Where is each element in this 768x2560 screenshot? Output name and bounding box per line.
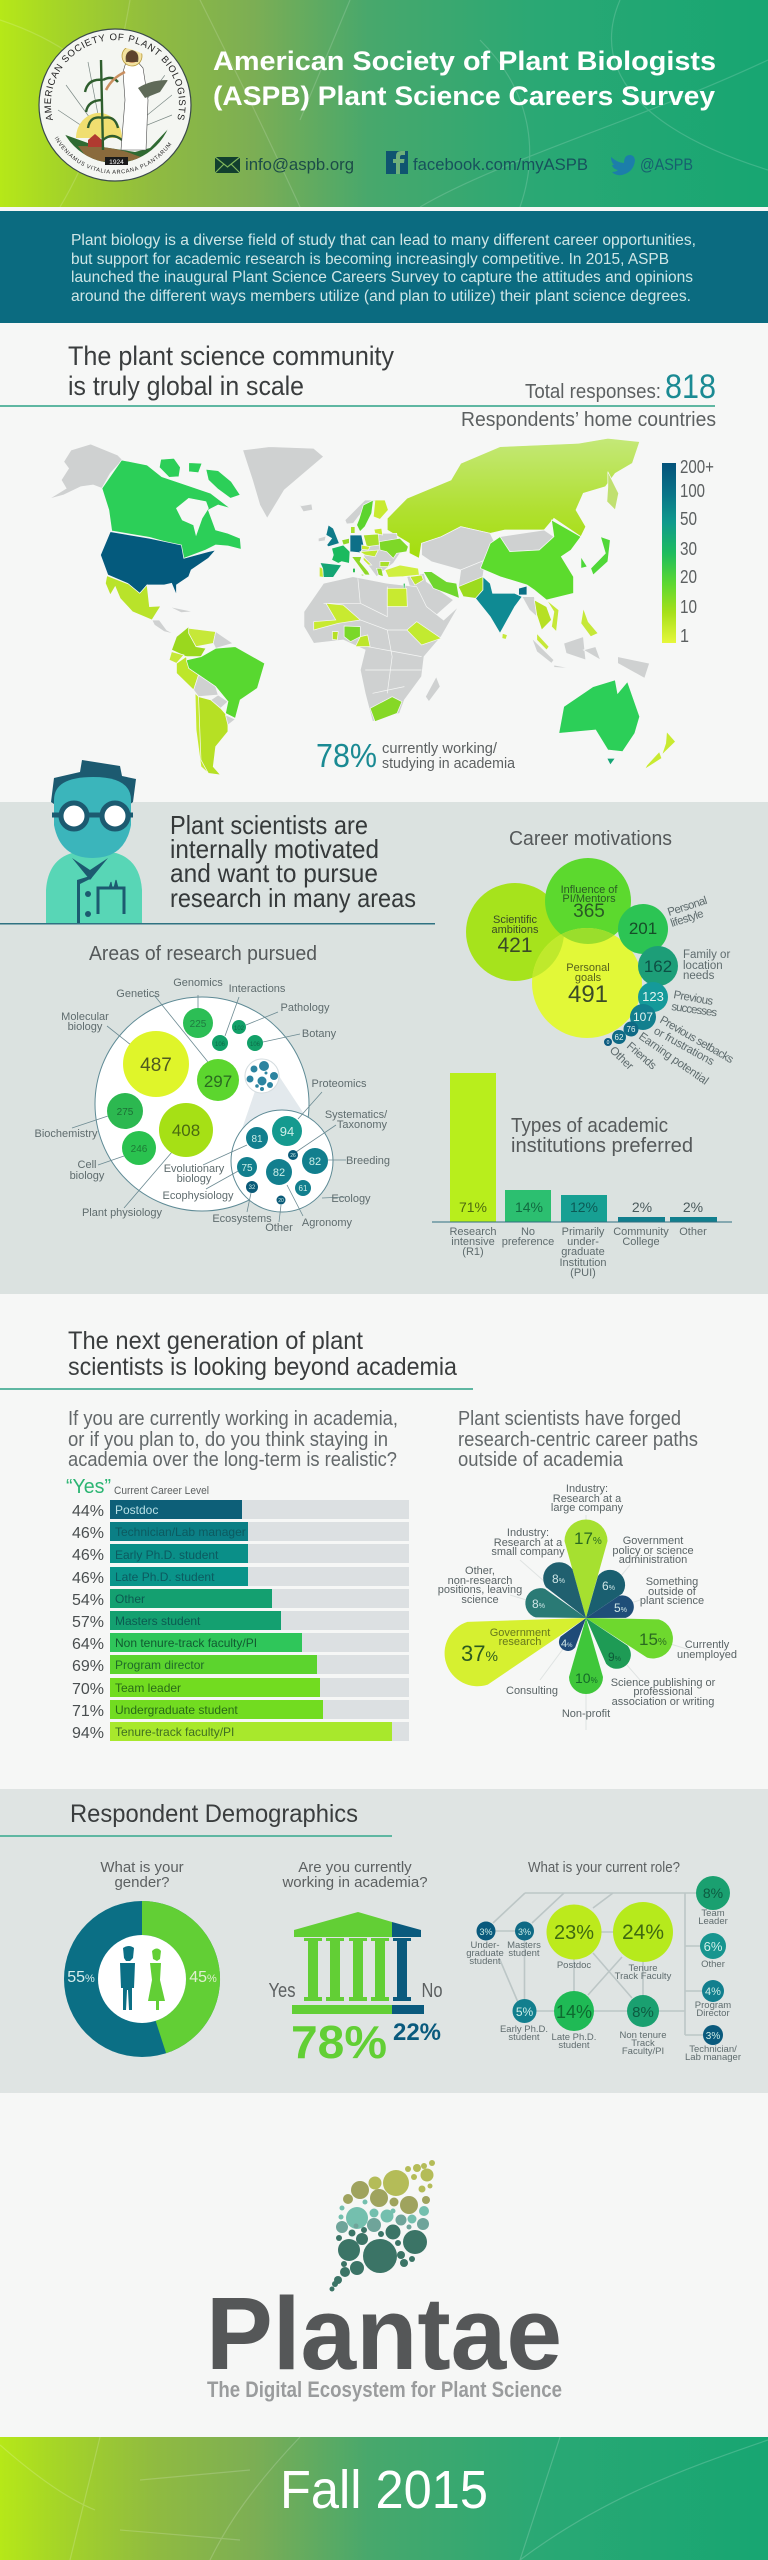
petal labels: association or writing xyxy=(612,1696,714,1708)
intro text xyxy=(71,232,696,305)
petal labels: plant science xyxy=(640,1595,704,1607)
bar values: 2% xyxy=(632,1199,652,1215)
chart title: Areas of research pursued xyxy=(89,943,317,965)
bar labels: (R1) xyxy=(462,1246,484,1258)
bar labels: Early Ph.D. student xyxy=(115,1548,219,1562)
petal values: 9% xyxy=(608,1650,621,1664)
motivation values: goals xyxy=(575,972,602,984)
bar percentages: 46% xyxy=(72,1547,104,1564)
heading: plant scientists: and want to pursue xyxy=(170,858,378,888)
bar labels: intensive xyxy=(451,1236,495,1248)
chart: yes by career level xyxy=(66,1476,409,1742)
role values: 6% xyxy=(704,1939,723,1954)
bar labels: Other xyxy=(115,1592,145,1606)
world map xyxy=(49,438,675,775)
question: gender? xyxy=(114,1874,170,1891)
motivation values: PI/Mentors xyxy=(562,893,616,905)
heading: next generation xyxy=(0,1327,473,1390)
bubble labels: Ecosystems xyxy=(212,1213,272,1225)
icon: woman xyxy=(148,1948,165,2010)
question: What is your current role? xyxy=(528,1859,680,1876)
petal labels: Research at a xyxy=(553,1493,622,1505)
bar percentages: 69% xyxy=(72,1658,104,1675)
bar percentages: 57% xyxy=(72,1614,104,1631)
total responses: Respondents’ home countries xyxy=(461,409,716,431)
chart: academia temple xyxy=(268,1859,442,2068)
role labels: Track xyxy=(631,2038,655,2049)
bar labels: Research xyxy=(449,1226,497,1238)
map legend: 20 xyxy=(680,567,697,587)
bar fills xyxy=(110,1500,242,1519)
petal labels: Non-profit xyxy=(562,1708,610,1720)
map legend: 1 xyxy=(680,626,689,646)
bars xyxy=(450,1073,496,1222)
petal labels: large company xyxy=(551,1502,624,1514)
petal labels xyxy=(438,1483,737,1720)
bubble labels xyxy=(35,977,390,1234)
bubble labels: Cell xyxy=(78,1159,96,1171)
bubble values: 106 xyxy=(250,1042,261,1048)
petal values: 6% xyxy=(602,1579,615,1593)
bubble values: 246 xyxy=(131,1144,148,1155)
motivation values: 201 xyxy=(629,919,657,938)
bar labels: graduate xyxy=(561,1246,605,1258)
bar labels: Team leader xyxy=(115,1681,181,1695)
role labels: Track Faculty xyxy=(615,1971,672,1982)
question: staying in academia: academia over the long-term is realistic? xyxy=(68,1449,397,1471)
bubble values: 32 xyxy=(249,1185,256,1191)
bubble values: 26 xyxy=(290,1153,296,1159)
heading: career paths outside academia: Plant scientists have forged xyxy=(458,1408,681,1430)
petal labels: Research at a xyxy=(494,1537,563,1549)
motivation values: 0 xyxy=(607,1040,610,1046)
petal values: 15% xyxy=(639,1630,667,1649)
bubble labels: biology xyxy=(68,1021,103,1033)
role values xyxy=(479,1885,723,2042)
seal: society name: AMERICAN SOCIETY OF PLANT BIOLOGISTS xyxy=(44,34,186,120)
heading: global community: is truly global in scale xyxy=(68,371,304,401)
bar values: 71% xyxy=(459,1199,487,1215)
Plantae tagline: The Digital Ecosystem for Plant Science xyxy=(207,2377,562,2402)
bubble labels: Plant physiology xyxy=(82,1207,163,1219)
chart: gender donut xyxy=(64,1859,220,2057)
motivation labels: Friends xyxy=(624,1040,659,1072)
question: working in academia? xyxy=(281,1874,428,1891)
bar values: 12% xyxy=(570,1199,598,1215)
role bubbles xyxy=(696,1876,730,1910)
motivation values xyxy=(491,884,672,1046)
role values: 5% xyxy=(516,2005,534,2019)
role labels: Team xyxy=(701,1908,725,1919)
bar labels: preference xyxy=(502,1236,554,1248)
bar percentages: 71% xyxy=(72,1703,104,1720)
total responses: Total responses: xyxy=(525,381,661,403)
role labels: Masters xyxy=(507,1940,541,1951)
bar labels: Non tenure-track faculty/PI xyxy=(115,1636,257,1650)
petal labels: outside of xyxy=(648,1586,697,1598)
bar labels: Masters student xyxy=(115,1614,201,1628)
petal values: 10% xyxy=(575,1670,598,1686)
bubble labels: Agronomy xyxy=(302,1217,353,1229)
petal labels: Government xyxy=(490,1627,550,1639)
petal labels: unemployed xyxy=(677,1649,737,1661)
role values: 8% xyxy=(703,1885,723,1901)
petal values: 37% xyxy=(461,1641,498,1666)
role labels: student xyxy=(508,1948,540,1959)
intro panel xyxy=(0,211,768,323)
motivation values: 76 xyxy=(627,1025,636,1034)
bar percentages: 44% xyxy=(72,1503,104,1520)
role values: 3% xyxy=(518,1927,531,1937)
map legend: 30 xyxy=(680,539,697,559)
motivation values: Personal xyxy=(566,962,610,974)
role labels: Faculty/PI xyxy=(622,2046,664,2057)
bar percentages: 94% xyxy=(72,1725,104,1742)
chart legend: “Yes” xyxy=(66,1476,111,1498)
question: Are you currently xyxy=(298,1859,412,1876)
motivation values: Influence of xyxy=(561,884,618,896)
bubble values: 75 xyxy=(241,1163,253,1174)
bar tracks xyxy=(110,1500,409,1741)
bubble values: 106 xyxy=(215,1042,226,1048)
bubble values: 94 xyxy=(280,1124,294,1139)
petal labels: policy or science xyxy=(612,1545,694,1557)
temple: no portion xyxy=(392,1922,424,2014)
bubble values xyxy=(117,1019,321,1204)
bubble labels: Proteomics xyxy=(311,1078,367,1090)
map: Europe and Middle East xyxy=(300,500,459,607)
motivation labels: Earning potential xyxy=(636,1031,710,1087)
role values: 24% xyxy=(622,1921,664,1944)
bar values xyxy=(459,1199,703,1215)
heading: plant scientists xyxy=(0,810,435,924)
intro text: launched the inaugural Plant Science Careers Survey to capture the attitudes and opinions xyxy=(71,269,693,286)
footer date: Fall 2015 xyxy=(280,2460,488,2520)
role labels: Lab manager xyxy=(685,2052,741,2063)
motivation values: Scientific xyxy=(493,914,538,926)
petal values: 4% xyxy=(561,1638,573,1650)
role labels: Director xyxy=(696,2008,730,2019)
intro text: but support for academic research is becoming increasingly competitive. In 2015, ASPB xyxy=(71,251,669,268)
question: staying in academia: If you are currently working in academia, xyxy=(68,1408,398,1430)
petal labels: Government xyxy=(623,1535,683,1547)
bar labels: (PUI) xyxy=(570,1267,596,1279)
petal labels: Consulting xyxy=(506,1685,558,1697)
motivation labels: location xyxy=(683,960,723,972)
role labels: Other xyxy=(701,1959,725,1970)
chart title: Career motivations xyxy=(509,828,672,850)
bar values: 2% xyxy=(683,1199,703,1215)
petal labels: science xyxy=(461,1594,499,1606)
petal labels: Science publishing or xyxy=(611,1677,716,1689)
seal: founding year: 1924 xyxy=(109,159,124,166)
bubble labels: Evolutionary xyxy=(164,1163,225,1175)
map legend: 200+ xyxy=(680,457,714,477)
motivation labels xyxy=(607,895,736,1087)
connectors xyxy=(486,1893,713,2035)
role values: 3% xyxy=(706,2031,720,2042)
bubble values: 408 xyxy=(172,1121,200,1140)
bubble labels: biology xyxy=(70,1170,105,1182)
question: What is your xyxy=(100,1859,184,1876)
header banner xyxy=(0,0,768,207)
icon: mail xyxy=(215,157,240,173)
motivation labels: Previous setbacks xyxy=(658,1014,736,1066)
role values: 8% xyxy=(632,2004,654,2021)
header title xyxy=(213,46,716,111)
petal labels: positions, leaving xyxy=(438,1584,522,1596)
bubble values: 81 xyxy=(251,1134,263,1145)
bar labels: under- xyxy=(567,1236,599,1248)
chart: current role network xyxy=(466,1859,741,2063)
petal labels: non-research xyxy=(448,1575,512,1587)
chart: academia temple: 22% xyxy=(393,2019,441,2046)
heading: plant scientists: internally motivated xyxy=(170,834,379,864)
heading: career paths outside academia: outside of academia xyxy=(458,1449,624,1471)
bubble labels: Molecular xyxy=(61,1011,109,1023)
leader lines xyxy=(72,995,346,1222)
seal: founding year xyxy=(105,157,128,166)
petal values: 17% xyxy=(574,1529,602,1548)
bar labels xyxy=(449,1226,707,1279)
bubble labels: Taxonomy xyxy=(337,1119,388,1131)
bubble values: 82 xyxy=(309,1156,321,1168)
bar labels: Tenure-track faculty/PI xyxy=(115,1725,234,1739)
petal labels: Currently xyxy=(685,1639,730,1651)
small cluster inset xyxy=(245,1059,279,1093)
motivation values: 107 xyxy=(633,1010,653,1024)
motivation values: ambitions xyxy=(491,924,539,936)
intro text: around the different ways members utilize (and plan to utilize) their plant science degrees. xyxy=(71,288,691,305)
map legend: 50 xyxy=(680,509,697,529)
heading: global community xyxy=(0,341,715,407)
motivation labels: Other xyxy=(607,1045,636,1073)
bubble labels: Pathology xyxy=(281,1002,330,1014)
role labels: student xyxy=(469,1956,501,1967)
seal: latin motto: INVENIAMUS VITALIA ARCANA PLANTARUM xyxy=(54,136,172,174)
role labels: Non tenure xyxy=(619,2030,667,2041)
heading: next generation: scientists is looking beyond academia xyxy=(68,1353,457,1381)
contact row xyxy=(215,151,693,175)
icon: Plantae leaf logo xyxy=(330,2160,435,2292)
chart: yes by career level: Current Career Level xyxy=(114,1485,209,1497)
bubble values: 297 xyxy=(204,1072,232,1091)
footer banner xyxy=(0,2437,768,2560)
motivation values: 123 xyxy=(642,989,664,1004)
bar labels xyxy=(115,1503,257,1739)
bar percentages xyxy=(72,1503,104,1742)
role labels: Early Ph.D. xyxy=(500,2024,548,2035)
petal values xyxy=(461,1529,667,1686)
role labels: graduate xyxy=(466,1948,504,1959)
bubble values: 275 xyxy=(117,1107,134,1118)
chart: academia temple: No xyxy=(422,1980,442,2002)
question: staying in academia: or if you plan to, do you think staying in xyxy=(68,1429,388,1451)
petal labels: professional xyxy=(633,1686,693,1698)
bar percentages: 64% xyxy=(72,1636,104,1653)
yes no labels: Yes xyxy=(268,1980,296,2002)
role labels: Tenure xyxy=(628,1963,658,1974)
bar labels: Community xyxy=(613,1226,669,1238)
facebook handle: facebook.com/myASPB xyxy=(413,155,588,174)
question xyxy=(281,1859,428,1891)
Plantae wordmark: Plantae xyxy=(206,2276,562,2391)
chart: career motivations xyxy=(466,828,736,1087)
role labels xyxy=(466,1908,741,2063)
heading: respondent demographics: Respondent Demographics xyxy=(70,1800,358,1828)
chart: types of academic institutions xyxy=(432,1073,732,1279)
petal labels: research xyxy=(499,1636,541,1648)
chart: areas of research xyxy=(35,943,390,1234)
bar labels: Other xyxy=(679,1226,707,1238)
icon: man xyxy=(120,1946,135,2010)
motivation labels: Personal xyxy=(666,895,709,919)
chart: gender donut: 45% xyxy=(189,1969,217,1986)
panel: respondent demographics xyxy=(0,1789,768,2093)
role labels: Under- xyxy=(470,1940,500,1951)
role values: 3% xyxy=(479,1927,493,1937)
role labels: Technician/ xyxy=(689,2044,737,2055)
map legend: 10 xyxy=(680,597,697,617)
heading: global community: The plant science community xyxy=(68,341,394,371)
bar percentages: 54% xyxy=(72,1592,104,1609)
motivation labels: or frustrations xyxy=(652,1025,716,1068)
bubble labels: Other xyxy=(265,1222,293,1234)
petal values: 8% xyxy=(552,1572,565,1586)
panel: motivations and research areas xyxy=(0,802,768,1294)
bubble values: 82 xyxy=(273,1167,285,1179)
zoomed bubbles xyxy=(272,1116,302,1146)
motivation values: 421 xyxy=(497,934,533,957)
bar labels: Technician/Lab manager xyxy=(115,1525,246,1539)
ASPB seal logo xyxy=(38,28,192,182)
role labels: Late Ph.D. xyxy=(552,2032,596,2043)
motivation values: 162 xyxy=(644,957,672,976)
petal labels: Other, xyxy=(465,1565,495,1577)
twitter handle: @ASPB xyxy=(640,155,693,174)
role labels: Leader xyxy=(698,1916,728,1927)
seal: illustration xyxy=(57,46,172,165)
motivation values: 491 xyxy=(568,981,608,1008)
bubble values: 487 xyxy=(140,1055,172,1076)
petal values: 5% xyxy=(614,1601,627,1615)
role values: 23% xyxy=(554,1922,594,1944)
bubble labels: Biochemistry xyxy=(35,1128,98,1140)
temple: yes portion xyxy=(292,1912,392,2014)
heading: next generation: The next generation of plant xyxy=(68,1327,363,1355)
heading: career paths outside academia xyxy=(458,1408,698,1471)
heading: plant scientists: research in many areas xyxy=(170,883,416,913)
bubble values: 102 xyxy=(234,1026,245,1032)
motivation labels: needs xyxy=(683,970,715,982)
role labels: Postdoc xyxy=(557,1960,591,1971)
bubbles xyxy=(123,1031,189,1097)
heading: career paths outside academia: research-centric career paths xyxy=(458,1429,698,1451)
bar percentages: 70% xyxy=(72,1681,104,1698)
icon: scientist xyxy=(46,760,142,923)
bubble labels: Systematics/ xyxy=(325,1109,388,1121)
bar labels: Undergraduate student xyxy=(115,1703,238,1717)
header title: (ASPB) Plant Science Careers Survey xyxy=(213,81,715,111)
motivation labels: Family or xyxy=(683,949,730,961)
bubble labels: Breeding xyxy=(346,1155,390,1167)
petal labels: administration xyxy=(619,1554,687,1566)
big values: 78% xyxy=(291,2016,387,2068)
bubble labels: Genetics xyxy=(116,988,160,1000)
heading: plant scientists: Plant scientists are xyxy=(170,810,368,840)
bubble values: 225 xyxy=(190,1019,207,1030)
chart: types of academic institutions: institutions preferred xyxy=(511,1135,693,1157)
bubble labels: Ecology xyxy=(331,1193,371,1205)
icon: twitter bird xyxy=(611,155,635,175)
header title: American Society of Plant Biologists xyxy=(213,46,716,76)
bar labels: Institution xyxy=(559,1257,607,1269)
bar labels: Postdoc xyxy=(115,1503,158,1517)
bar labels: College xyxy=(622,1236,660,1248)
petal labels: small company xyxy=(491,1546,565,1558)
bubble values: 61 xyxy=(299,1184,308,1193)
callout: 78% in academia: studying in academia xyxy=(382,755,516,772)
bubble labels: Genomics xyxy=(173,977,223,989)
bar labels: Late Ph.D. student xyxy=(115,1570,215,1584)
motivation labels: Previous xyxy=(672,989,714,1008)
total responses: 818 xyxy=(665,368,716,406)
motivation values: 365 xyxy=(573,901,605,922)
petal labels: Something xyxy=(646,1576,698,1588)
role labels: student xyxy=(508,2032,540,2043)
petal labels: Industry: xyxy=(566,1483,608,1495)
bar values: 14% xyxy=(515,1199,543,1215)
bubble labels: Interactions xyxy=(229,983,286,995)
email: info@aspb.org xyxy=(245,155,354,174)
role labels: student xyxy=(558,2040,590,2051)
bubble labels: biology xyxy=(177,1173,212,1185)
callout: 78% in academia: 78% xyxy=(316,737,377,774)
callout: 78% in academia: currently working/ xyxy=(382,740,498,757)
intro text: Plant biology is a diverse field of study that can lead to many different career opportunities, xyxy=(71,232,696,249)
gender values: 55% xyxy=(67,1969,95,1986)
role values: 14% xyxy=(556,2002,592,2022)
bubble labels: Botany xyxy=(302,1028,337,1040)
question xyxy=(100,1859,184,1891)
motivation labels: successes xyxy=(671,1001,718,1019)
bar labels: No xyxy=(521,1226,535,1238)
icon: facebook xyxy=(386,151,408,174)
callout: 78% in academia xyxy=(316,737,516,774)
motivation labels: lifestyle xyxy=(669,908,705,930)
petal labels: Industry: xyxy=(507,1527,549,1539)
role labels: Program xyxy=(695,2000,731,2011)
total responses xyxy=(461,368,716,431)
bar labels: Program director xyxy=(115,1658,204,1672)
chart: career path petals xyxy=(436,1483,737,1730)
role values: 4% xyxy=(705,1986,721,1998)
map legend xyxy=(662,457,714,646)
bar percentages: 46% xyxy=(72,1570,104,1587)
motivation values: 62 xyxy=(615,1033,624,1042)
bar labels: Primarily xyxy=(562,1226,605,1238)
bar percentages: 46% xyxy=(72,1525,104,1542)
bubble labels: Ecophysiology xyxy=(163,1190,234,1202)
petal values: 8% xyxy=(532,1597,545,1611)
bubble values: 20 xyxy=(278,1198,284,1204)
map legend: 100 xyxy=(680,481,705,501)
question: staying in academia xyxy=(68,1408,398,1471)
chart title: Types of academic xyxy=(511,1115,668,1137)
